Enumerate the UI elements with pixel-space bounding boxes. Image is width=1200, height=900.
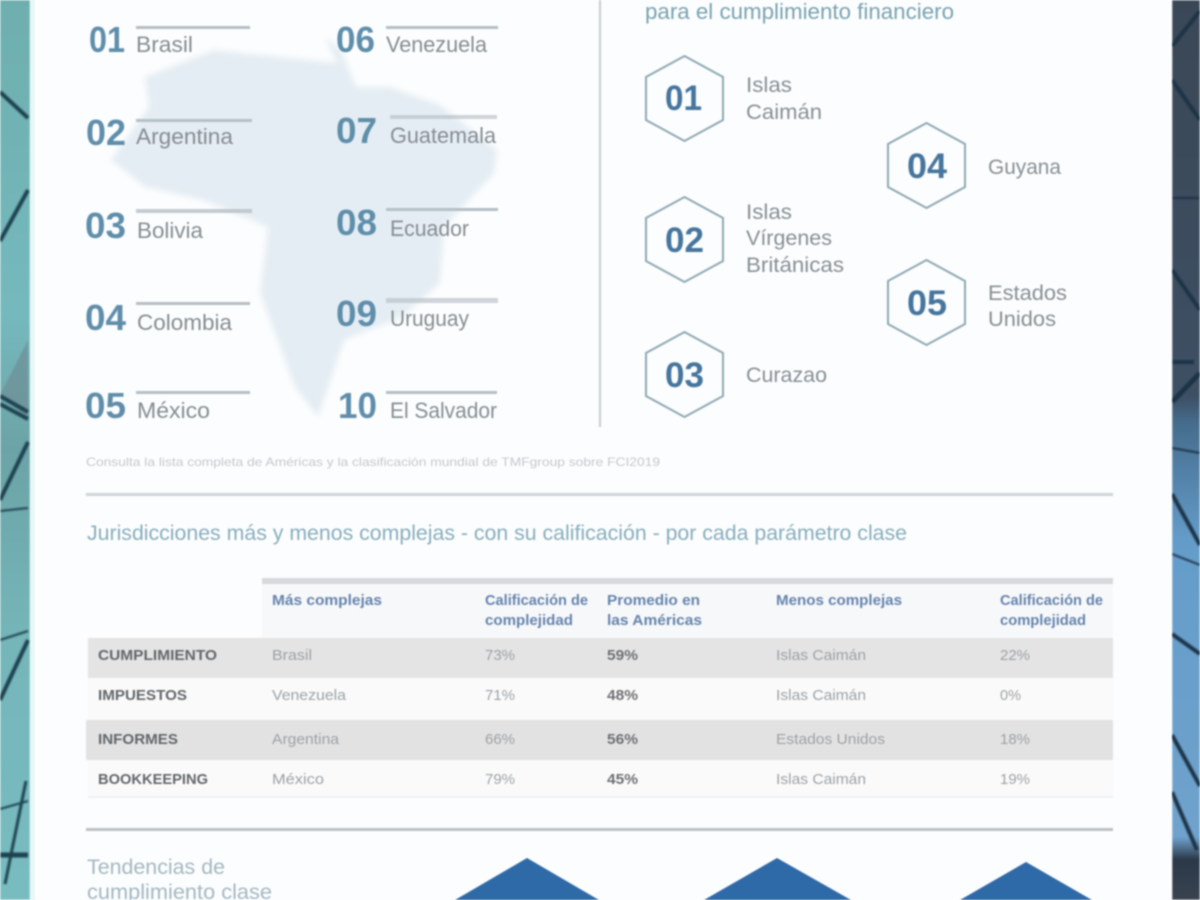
table header: complejidad (485, 612, 573, 629)
item 03 Curazao (646, 332, 827, 417)
item 01 Brasil: Brasil (136, 32, 193, 57)
row: bookkeeping: 79% (485, 771, 515, 788)
item 01 Islas Caimán: Islas (746, 74, 792, 97)
item 03 Curazao: Curazao (746, 364, 827, 387)
item 09 Uruguay (336, 293, 498, 334)
table header (262, 578, 1113, 638)
row: cumplimiento: 59% (607, 647, 638, 664)
item 04 Guyana (888, 123, 1061, 208)
item 02 Argentina: Argentina (136, 124, 234, 149)
item 06 Venezuela: Venezuela (386, 32, 488, 57)
row: impuestos: 0% (1000, 687, 1021, 704)
item 01 Brasil (89, 19, 250, 60)
item 08 Ecuador: Ecuador (390, 216, 469, 241)
panel: least complex jurisdictions (645, 0, 1067, 417)
item 07 Guatemala: Guatemala (390, 123, 497, 148)
row: impuestos: IMPUESTOS (98, 687, 187, 704)
item 02 Argentina: 02 (86, 112, 126, 153)
table header: complejidad (1000, 612, 1086, 629)
item 02 Islas Vírgenes Británicas: Británicas (746, 254, 844, 277)
item 05 Estados Unidos: Estados (988, 282, 1067, 305)
row: informes: 56% (607, 731, 638, 748)
item 02 Argentina (86, 112, 252, 153)
row: informes: Argentina (272, 731, 340, 748)
item 08 Ecuador: 08 (336, 202, 377, 243)
item 10 El Salvador: El Salvador (390, 398, 497, 423)
section rule (86, 828, 1113, 831)
row: cumplimiento: CUMPLIMIENTO (98, 647, 217, 664)
table: complexity by parameter (86, 578, 1113, 798)
item 05 México: México (137, 398, 210, 423)
row: cumplimiento: Islas Caimán (776, 647, 866, 664)
item 05 Estados Unidos: 05 (907, 284, 947, 323)
row: bookkeeping: BOOKKEEPING (98, 771, 208, 788)
row: bookkeeping (88, 760, 1113, 798)
item 02 Islas Vírgenes Británicas (646, 197, 844, 282)
item 08 Ecuador (336, 202, 498, 243)
item 05 México: 05 (85, 385, 126, 426)
row: impuestos: 71% (485, 687, 515, 704)
icon: blue hexagon top 1 (455, 858, 599, 900)
vertical divider (599, 0, 601, 427)
table header: Calificación de (1000, 592, 1103, 609)
item 07 Guatemala: 07 (336, 110, 377, 151)
background: left teal building photo strip (0, 0, 30, 900)
row: bookkeeping: México (272, 771, 324, 788)
item 02 Islas Vírgenes Británicas: Vírgenes (746, 227, 832, 250)
item 02 Islas Vírgenes Británicas: Islas (746, 201, 792, 224)
item 10 El Salvador: 10 (338, 385, 377, 426)
table header: las Américas (607, 612, 702, 629)
table header: Calificación de (485, 592, 588, 609)
panel: top 10 most complex jurisdictions (85, 19, 498, 426)
item 01 Brasil: 01 (89, 19, 125, 60)
item 03 Curazao: 03 (665, 356, 704, 395)
item 01 Islas Caimán: 01 (665, 79, 702, 118)
item 07 Guatemala (336, 110, 497, 151)
icon: blue hexagon top 3 (960, 862, 1092, 900)
row: informes: 66% (485, 731, 515, 748)
source note: Consulta la lista completa de Américas y la clasificación mundial de TMFgroup sobre FCI2019 (86, 455, 660, 469)
item 04 Guyana: 04 (907, 147, 948, 186)
item 01 Islas Caimán: Caimán (746, 101, 822, 124)
row: impuestos (88, 678, 1113, 720)
heading: table title: Jurisdicciones más y menos complejas - con su calificación - por cada parámetro clase (87, 522, 907, 545)
item 05 Estados Unidos (888, 260, 1067, 345)
row: informes: 18% (1000, 731, 1030, 748)
item 05 Estados Unidos: Unidos (988, 308, 1056, 331)
row: bookkeeping: 19% (1000, 771, 1030, 788)
item 06 Venezuela: 06 (336, 19, 375, 60)
section rule (86, 493, 1113, 496)
row: cumplimiento: 73% (485, 647, 515, 664)
item 09 Uruguay: 09 (336, 293, 377, 334)
row: informes: INFORMES (98, 731, 178, 748)
item 05 México (85, 385, 250, 426)
table header: Más complejas (272, 592, 382, 609)
row: impuestos: Venezuela (272, 687, 347, 704)
row: impuestos: 48% (607, 687, 638, 704)
row: cumplimiento: Brasil (272, 647, 312, 664)
background: right blue building photo strip (1172, 0, 1200, 900)
item 04 Colombia: Colombia (137, 310, 233, 335)
map silhouette (111, 37, 497, 417)
item 09 Uruguay: Uruguay (390, 306, 469, 331)
item 06 Venezuela (336, 19, 498, 60)
row: cumplimiento (88, 638, 1113, 678)
item 03 Bolivia: Bolivia (137, 218, 204, 243)
row: impuestos: Islas Caimán (776, 687, 866, 704)
row: cumplimiento: 22% (1000, 647, 1030, 664)
item 04 Colombia (85, 297, 250, 338)
heading: key compliance trends (87, 856, 272, 900)
table header: Menos complejas (776, 592, 902, 609)
item 04 Colombia: 04 (85, 297, 126, 338)
item 04 Guyana: Guyana (988, 156, 1061, 179)
row: bookkeeping: Islas Caimán (776, 771, 866, 788)
item 02 Islas Vírgenes Británicas: 02 (665, 221, 704, 260)
row: informes: Estados Unidos (776, 731, 885, 748)
row: bookkeeping: 45% (607, 771, 638, 788)
item 01 Islas Caimán (646, 56, 822, 141)
item 03 Bolivia (85, 205, 252, 246)
item 10 El Salvador (338, 385, 497, 426)
table header: Promedio en (607, 592, 700, 609)
heading: key compliance trends: Tendencias de (87, 856, 225, 879)
row: informes (86, 720, 1113, 760)
icon: blue hexagon top 2 (704, 858, 851, 900)
item 03 Bolivia: 03 (85, 205, 126, 246)
